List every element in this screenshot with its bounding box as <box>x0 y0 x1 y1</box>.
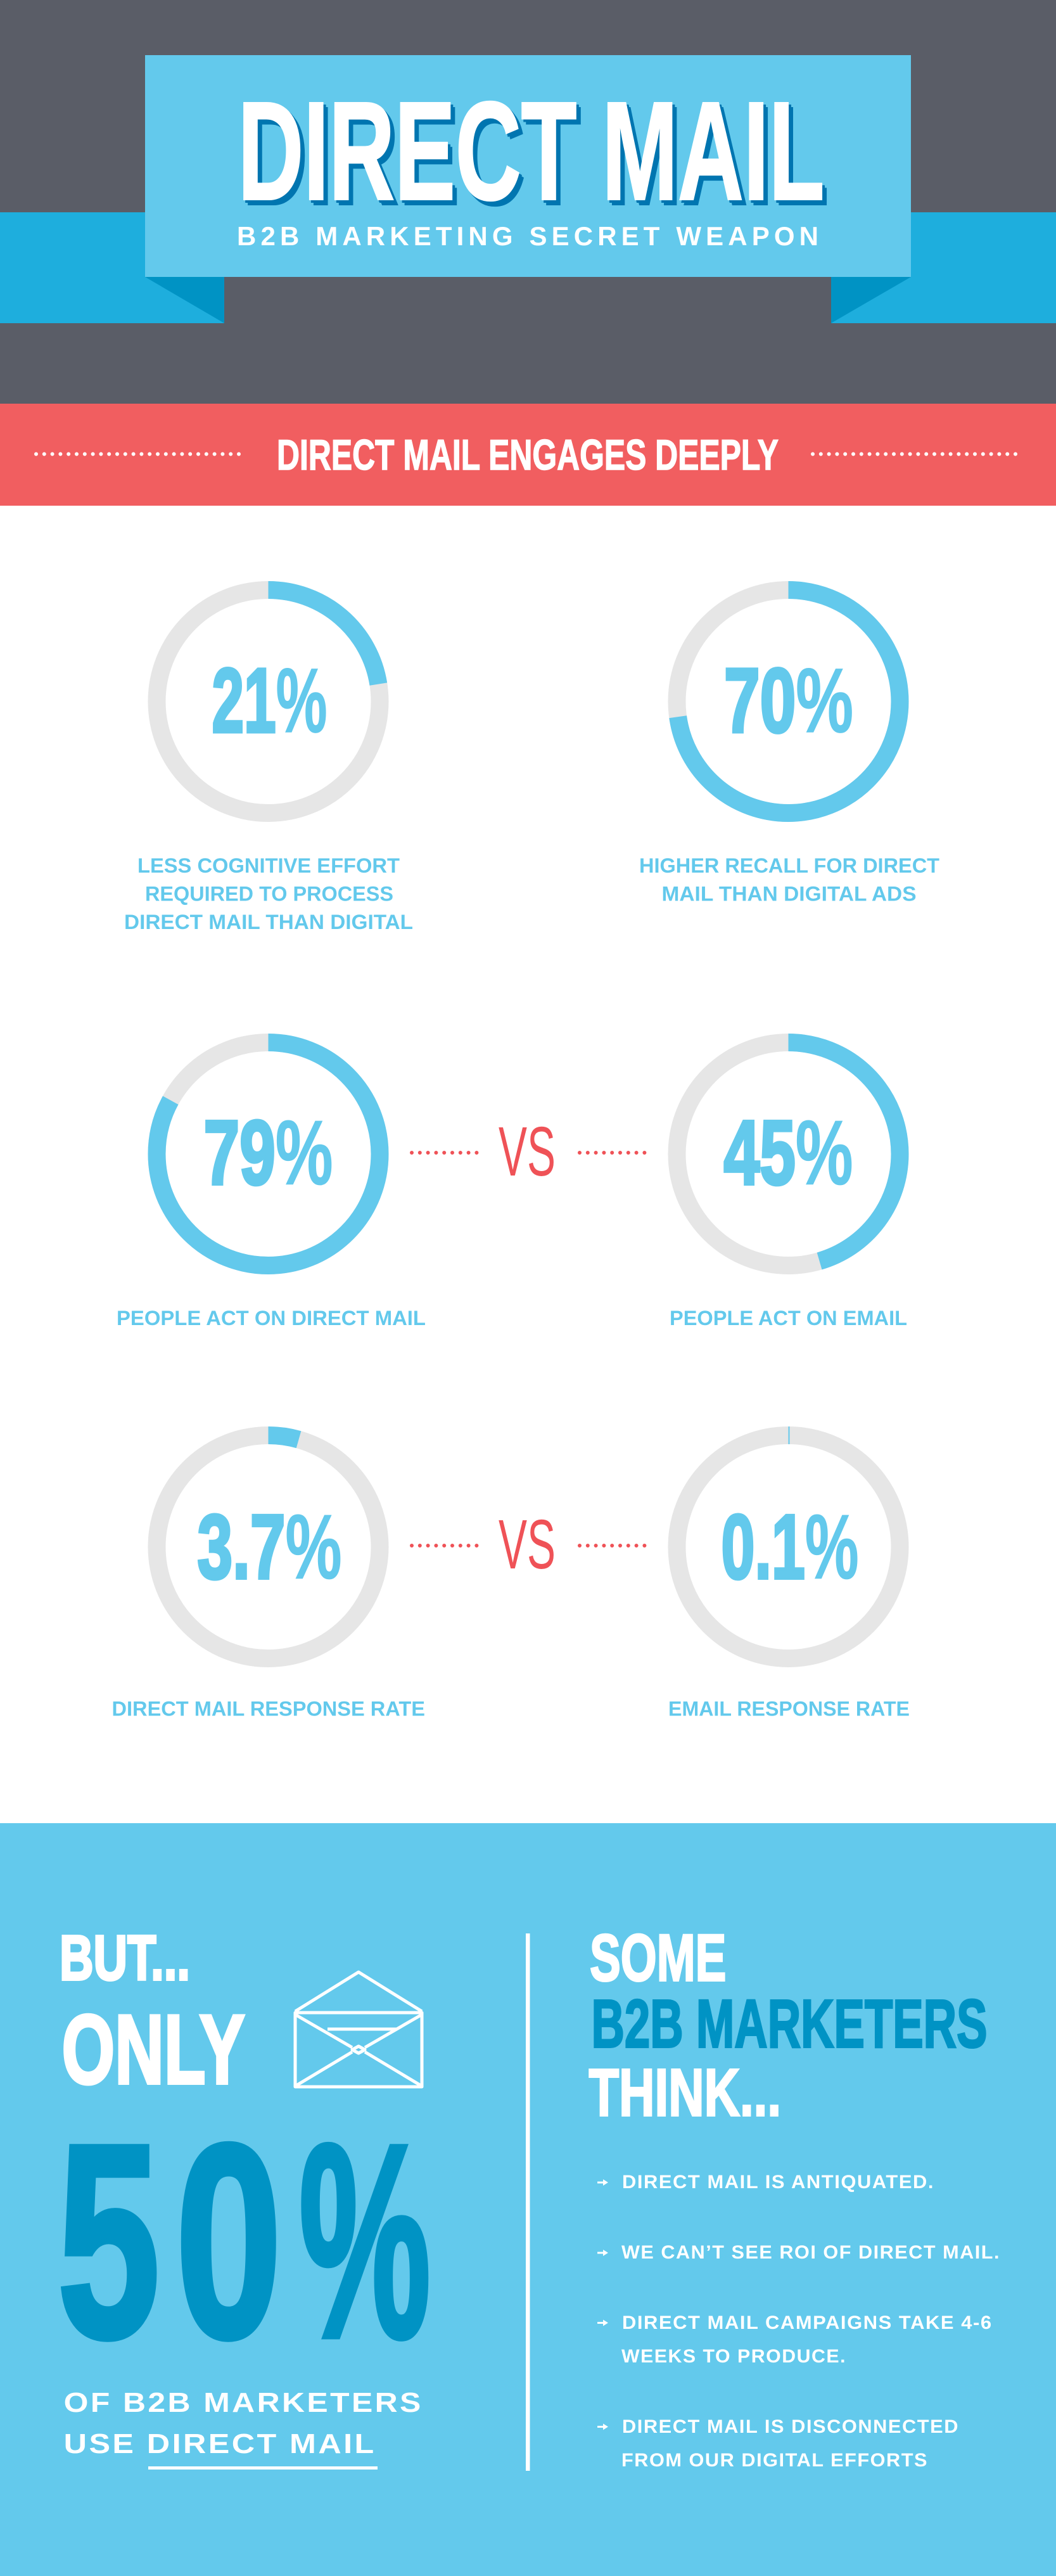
donut chart 21% <box>157 590 380 813</box>
versus marker, row 3: VS <box>499 1506 556 1584</box>
right column: marketers think <box>589 1921 1000 2471</box>
caption: EMAIL RESPONSE RATE <box>668 1697 910 1720</box>
bullet: roi: WE CAN’T SEE ROI OF DIRECT MAIL. <box>621 2242 1000 2263</box>
icon: envelope <box>295 1972 422 2087</box>
stat: 45% <box>670 1042 907 1330</box>
value 70%: 70% <box>724 650 853 752</box>
caption: OF B2B MARKETERS <box>64 2387 423 2418</box>
stat: 3.7% <box>111 1435 425 1720</box>
stat: 21% <box>124 590 413 933</box>
stat: 0.1% <box>668 1426 910 1720</box>
but only heading: BUT... <box>60 1923 190 1994</box>
bottom panel <box>0 1823 1056 2576</box>
bullet: campaigns <box>597 2312 993 2367</box>
caption: PEOPLE ACT ON EMAIL <box>670 1307 907 1330</box>
big number 50%: 0 <box>175 2087 282 2395</box>
value 0.1%: 0.1% <box>721 1496 859 1598</box>
donut chart 79% <box>157 1042 380 1266</box>
caption <box>64 2387 423 2470</box>
caption: DIRECT MAIL RESPONSE RATE <box>111 1697 425 1720</box>
bullet: campaigns: DIRECT MAIL CAMPAIGNS TAKE 4-6 <box>622 2312 993 2333</box>
but only heading <box>60 1923 245 2104</box>
caption: USE DIRECT MAIL <box>64 2428 376 2459</box>
stat: 70% <box>639 590 939 906</box>
donut chart 3.7% <box>157 1435 380 1658</box>
heading: THINK... <box>589 2056 781 2131</box>
donut chart 70% <box>677 590 900 813</box>
caption: LESS COGNITIVE EFFORT <box>137 854 400 877</box>
bullet: campaigns: WEEKS TO PRODUCE. <box>621 2346 846 2367</box>
bullet: disconnected: FROM OUR DIGITAL EFFORTS <box>621 2450 928 2471</box>
but only heading: ONLY <box>62 1995 245 2104</box>
value 21%: 21% <box>212 650 327 752</box>
caption: PEOPLE ACT ON DIRECT MAIL <box>117 1307 426 1330</box>
caption: HIGHER RECALL FOR DIRECT <box>639 854 939 877</box>
section heading band <box>0 404 1056 506</box>
subtitle: B2B MARKETING SECRET WEAPON <box>237 221 818 251</box>
stat: 79% <box>117 1042 426 1330</box>
caption: REQUIRED TO PROCESS <box>145 883 393 906</box>
heading text: DIRECT MAIL ENGAGES DEEPLY <box>277 431 779 479</box>
value 45%: 45% <box>723 1101 853 1204</box>
value 3.7%: 3.7% <box>198 1496 342 1598</box>
value 79%: 79% <box>204 1101 333 1204</box>
bullet: disconnected: DIRECT MAIL IS DISCONNECTED <box>622 2416 959 2437</box>
bullet: antiquated: DIRECT MAIL IS ANTIQUATED. <box>622 2172 934 2193</box>
caption <box>639 854 939 906</box>
caption: DIRECT MAIL THAN DIGITAL <box>124 911 413 933</box>
big number 50%: 5 <box>57 2087 160 2395</box>
left column: only 50% <box>57 1923 431 2470</box>
versus marker, row 2: VS <box>499 1113 556 1191</box>
heading: SOME <box>590 1921 726 1995</box>
caption <box>124 854 413 933</box>
heading <box>589 1921 987 2131</box>
bullet: disconnected <box>597 2416 959 2471</box>
donut chart 45% <box>677 1042 900 1266</box>
caption: MAIL THAN DIGITAL ADS <box>661 883 916 906</box>
donut chart 0.1% <box>677 1426 900 1658</box>
header panel <box>0 0 1056 404</box>
ribbon: left and right tails <box>0 212 1056 323</box>
big number 50%: % <box>299 2087 431 2395</box>
ribbon: title banner <box>145 55 911 277</box>
